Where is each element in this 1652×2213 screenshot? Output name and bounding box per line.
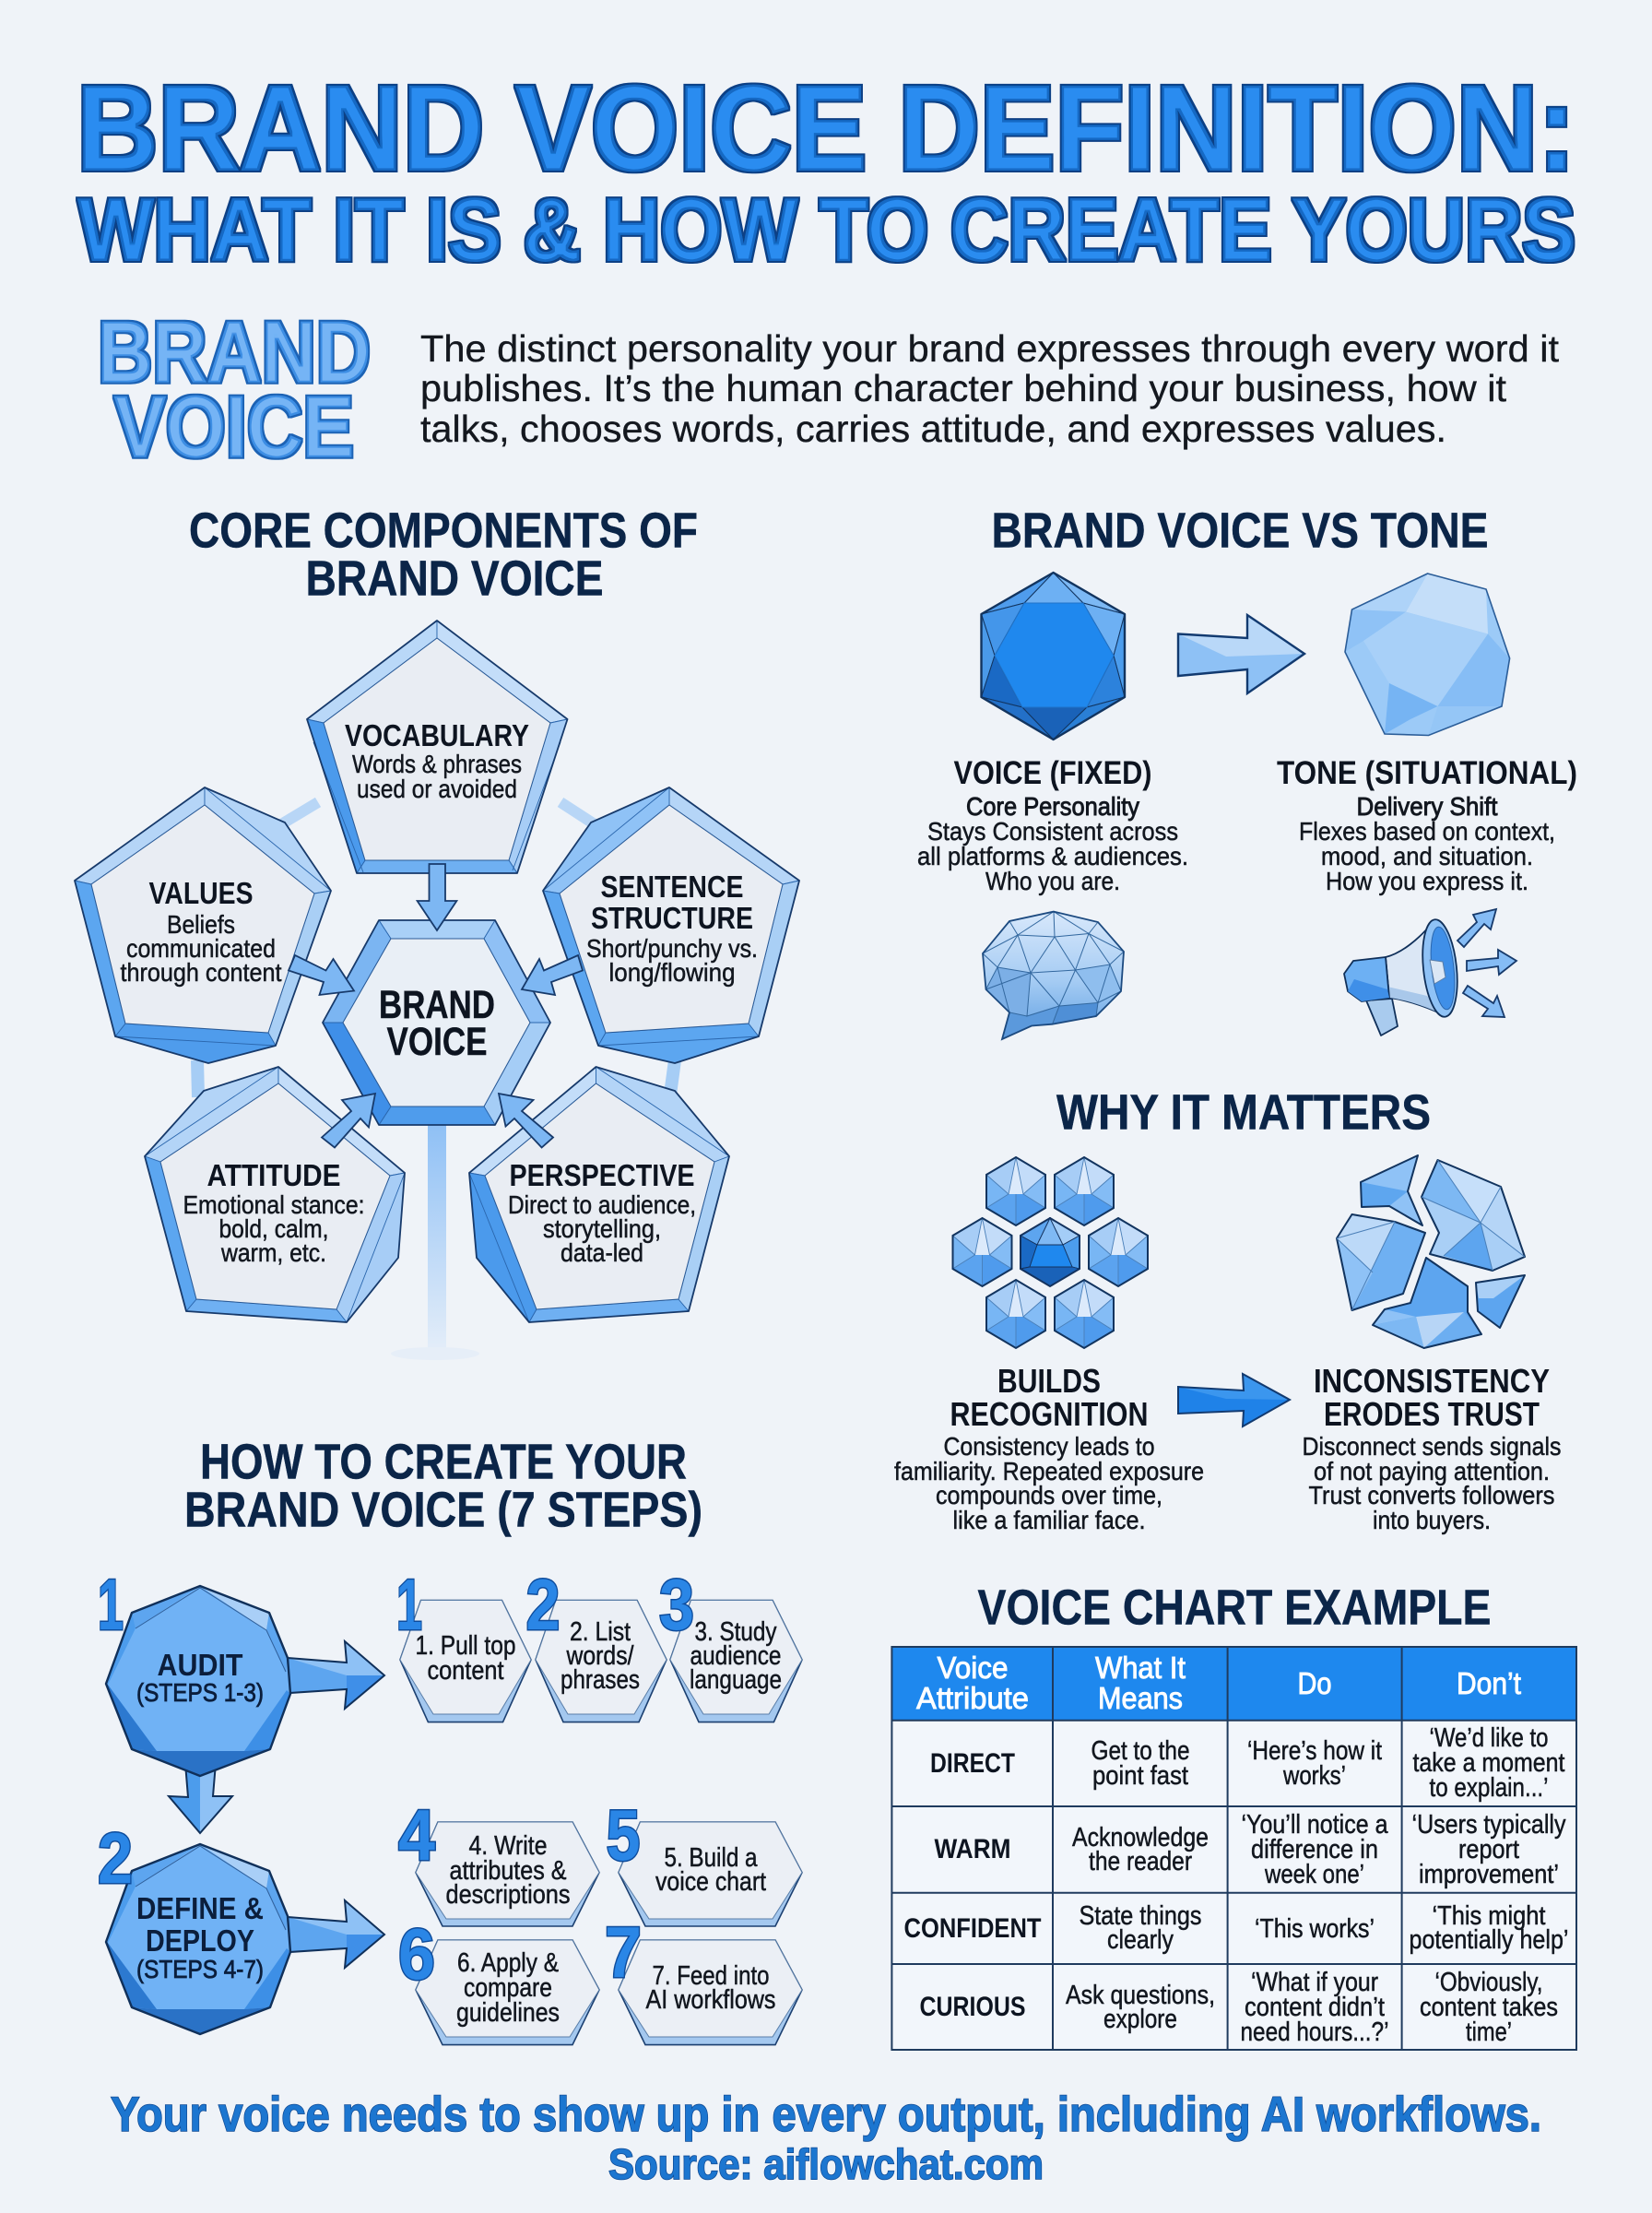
text: builds recognition: RECOGNITION <box>950 1395 1149 1433</box>
pentagon: vocabulary: used or avoided <box>357 775 517 803</box>
panel: steps flow <box>98 1564 802 2045</box>
row: warm: WARM <box>935 1834 1010 1864</box>
heading: core components: BRAND VOICE <box>306 551 603 607</box>
pentagon: vocabulary <box>307 621 568 873</box>
text: builds recognition: familiarity. Repeated exposure <box>894 1457 1204 1485</box>
row: warm: report <box>1458 1835 1519 1864</box>
pentagon: sentence structure: STRUCTURE <box>591 901 753 935</box>
pentagon: sentence structure <box>543 787 799 1063</box>
row: direct: to explain...’ <box>1429 1773 1549 1803</box>
text: inconsistency erodes trust: ERODES TRUST <box>1324 1395 1540 1433</box>
text: voice fixed: all platforms & audiences. <box>917 842 1188 870</box>
text: builds recognition: compounds over time, <box>936 1481 1162 1509</box>
row: warm: ‘You’ll notice a <box>1241 1810 1388 1840</box>
big numerals: 1 <box>396 1564 422 1645</box>
row: curious: explore <box>1103 2005 1177 2034</box>
row: warm: improvement’ <box>1419 1860 1559 1889</box>
heading: voice vs tone: BRAND VOICE VS TONE <box>992 503 1488 559</box>
step 2: words/ <box>566 1641 634 1671</box>
pentagon: vocabulary: Words & phrases <box>352 750 522 778</box>
heading: how to create: HOW TO CREATE YOUR <box>200 1435 687 1490</box>
definition text: publishes. It’s the human character behind your business, how it <box>420 367 1507 409</box>
pentagon: attitude: Emotional stance: <box>183 1190 365 1219</box>
step 3: audience <box>690 1641 782 1671</box>
pentagon: vocabulary: VOCABULARY <box>345 718 529 752</box>
heading: voice chart: VOICE CHART EXAMPLE <box>977 1580 1492 1636</box>
arrow: recognition to trust <box>1178 1374 1290 1426</box>
row: warm: ‘Users typically <box>1412 1810 1566 1840</box>
hexagon: brand voice: BRAND <box>379 983 495 1027</box>
big numerals: 7 <box>605 1911 642 1993</box>
arrow: voice to tone <box>1178 615 1304 693</box>
hexagon: brand voice: VOICE <box>387 1020 487 1064</box>
text: tone situational: Flexes based on context, <box>1299 817 1555 846</box>
definition text <box>420 327 1560 450</box>
row: direct: ‘Here’s how it <box>1247 1736 1382 1766</box>
step 5: voice chart <box>655 1867 766 1897</box>
title <box>77 60 1575 279</box>
pentagon: values: communicated <box>126 934 276 963</box>
icon: voice gem <box>981 573 1125 740</box>
text: tone situational: TONE (SITUATIONAL) <box>1277 755 1577 791</box>
step 7: AI workflows <box>645 1985 776 2015</box>
text: builds recognition: BUILDS <box>997 1362 1101 1400</box>
pentagon: perspective: data-led <box>560 1238 643 1267</box>
arrow: audit to steps <box>288 1641 384 1709</box>
row: confident: CONFIDENT <box>903 1913 1042 1944</box>
text: voice fixed: Who you are. <box>985 867 1120 895</box>
heading: why it matters: WHY IT MATTERS <box>1056 1084 1431 1140</box>
step 6: 6. Apply & <box>457 1948 559 1978</box>
step 4: descriptions <box>446 1880 570 1910</box>
gem: audit: AUDIT <box>157 1648 243 1682</box>
footer <box>111 2088 1541 2188</box>
arrow: define to steps <box>288 1900 384 1968</box>
row: direct: works’ <box>1282 1761 1346 1791</box>
pentagon: perspective: Direct to audience, <box>508 1190 696 1219</box>
text: voice fixed: VOICE (FIXED) <box>953 755 1152 791</box>
text: inconsistency erodes trust: Disconnect sends signals <box>1302 1432 1562 1461</box>
step 3: 3. Study <box>695 1617 777 1647</box>
arrow: audit to define <box>169 1752 232 1833</box>
row: warm: the reader <box>1089 1847 1192 1876</box>
row: direct: ‘We’d like to <box>1429 1723 1549 1753</box>
row: confident: ‘This might <box>1433 1901 1545 1931</box>
text: builds recognition: like a familiar face. <box>953 1506 1145 1534</box>
connectors <box>197 802 675 1097</box>
arrow: values to centre <box>289 955 354 995</box>
row: curious: content didn’t <box>1245 1993 1385 2022</box>
pentagon: attitude: warm, etc. <box>220 1238 326 1267</box>
row: direct: DIRECT <box>930 1748 1015 1779</box>
heading: core components: CORE COMPONENTS OF <box>189 503 698 559</box>
row: warm: difference in <box>1251 1835 1378 1864</box>
step 1 <box>400 1601 531 1722</box>
row: direct: Get to the <box>1092 1736 1189 1766</box>
arrow: vocabulary to centre <box>418 864 456 930</box>
text: inconsistency erodes trust <box>1302 1362 1562 1534</box>
gem: define and deploy: DEPLOY <box>146 1923 254 1958</box>
step 5 <box>619 1822 802 1926</box>
row: confident: potentially help’ <box>1409 1925 1569 1955</box>
row: confident <box>903 1901 1569 1955</box>
gem: define and deploy <box>106 1844 290 2034</box>
arrow: sentence structure to centre <box>522 955 583 995</box>
heading: how to create: BRAND VOICE (7 STEPS) <box>184 1483 702 1538</box>
row: curious: need hours...?’ <box>1241 2018 1388 2047</box>
pentagon: values: Beliefs <box>167 910 235 939</box>
brand voice wordmark: BRAND <box>98 303 371 400</box>
step 6: compare <box>464 1973 552 2003</box>
step 7: 7. Feed into <box>653 1961 769 1991</box>
pentagon: sentence structure: Short/punchy vs. <box>586 934 758 963</box>
pentagon: attitude: ATTITUDE <box>206 1158 341 1192</box>
step 4: attributes & <box>450 1856 566 1886</box>
step 1: content <box>428 1656 503 1686</box>
icon: megaphone <box>1344 917 1461 1035</box>
step 6 <box>416 1940 599 2045</box>
footer: Source: aiflowchat.com <box>608 2140 1044 2188</box>
text: voice fixed: Core Personality <box>966 792 1139 821</box>
text: tone situational: mood, and situation. <box>1321 842 1533 870</box>
step 7 <box>619 1940 802 2045</box>
row: curious: Ask questions, <box>1066 1981 1215 2010</box>
row: curious: time’ <box>1466 2018 1512 2047</box>
icon: hexagon cluster <box>953 1157 1148 1348</box>
table: voice chart <box>891 1647 1576 2050</box>
row: curious: ‘What if your <box>1251 1968 1378 1997</box>
text: inconsistency erodes trust: of not paying attention. <box>1314 1457 1550 1485</box>
row: direct: point fast <box>1092 1761 1188 1791</box>
big numerals: 4 <box>398 1794 435 1876</box>
brand voice wordmark <box>98 303 371 475</box>
row: confident: ‘This works’ <box>1255 1914 1375 1944</box>
step 5: 5. Build a <box>664 1843 758 1873</box>
text: voice fixed: Stays Consistent across <box>927 817 1178 846</box>
header row: Do <box>1298 1666 1331 1700</box>
text: tone situational: Delivery Shift <box>1357 792 1498 821</box>
header row: Don’t <box>1457 1666 1521 1700</box>
step 4: 4. Write <box>468 1831 548 1861</box>
row: curious: CURIOUS <box>920 1992 1025 2022</box>
header row: Voice <box>937 1651 1009 1685</box>
arrow: attitude to centre <box>322 1094 375 1147</box>
row: curious: ‘Obviously, <box>1434 1968 1543 1997</box>
row: confident: State things <box>1079 1901 1202 1931</box>
text: tone situational <box>1277 755 1577 895</box>
header row: Means <box>1098 1681 1183 1715</box>
row: direct <box>930 1723 1565 1803</box>
step 1: 1. Pull top <box>415 1631 516 1661</box>
step 3 <box>670 1601 802 1722</box>
pentagon: sentence structure: SENTENCE <box>601 870 743 904</box>
brand voice wordmark: VOICE <box>114 378 354 475</box>
pentagon: attitude: bold, calm, <box>219 1214 328 1243</box>
big numerals: 2 <box>525 1564 560 1645</box>
row: curious: content takes <box>1420 1993 1558 2022</box>
step 2: phrases <box>560 1665 640 1695</box>
pentagon: values: through content <box>120 958 282 987</box>
big numerals: 6 <box>398 1913 435 1994</box>
arrows: megaphone sound <box>1457 909 1516 1017</box>
big numerals: 2 <box>98 1817 133 1899</box>
row: warm <box>935 1810 1566 1889</box>
stem <box>391 1125 479 1360</box>
pentagon: perspective: storytelling, <box>543 1214 661 1243</box>
header row <box>916 1651 1521 1715</box>
pentagon: perspective: PERSPECTIVE <box>509 1158 695 1192</box>
gem: define and deploy: (STEPS 4-7) <box>136 1955 264 1983</box>
gem: define and deploy: DEFINE & <box>136 1891 264 1925</box>
row: warm: week one’ <box>1264 1860 1364 1889</box>
step 6: guidelines <box>456 1998 560 2028</box>
row: confident: clearly <box>1107 1925 1174 1955</box>
step 3: language <box>690 1665 782 1695</box>
text: tone situational: How you express it. <box>1326 867 1528 895</box>
big numerals <box>98 1564 694 1994</box>
pentagon: values <box>75 787 331 1063</box>
heading: core components <box>189 503 698 607</box>
row: warm: Acknowledge <box>1072 1823 1209 1852</box>
step 4 <box>416 1822 599 1926</box>
arrow: perspective to centre <box>499 1094 553 1147</box>
text: builds recognition: Consistency leads to <box>944 1432 1154 1461</box>
panel: core components diagram <box>75 621 799 1360</box>
text: inconsistency erodes trust: into buyers. <box>1373 1506 1491 1534</box>
pentagon: attitude <box>145 1067 405 1322</box>
big numerals: 3 <box>659 1564 694 1645</box>
row: curious <box>920 1968 1558 2047</box>
icon: shattered gem <box>1337 1155 1525 1348</box>
pentagon: sentence structure: long/flowing <box>608 958 736 987</box>
gem: audit <box>106 1586 290 1776</box>
big numerals: 1 <box>98 1564 124 1645</box>
text: inconsistency erodes trust: INCONSISTENCY <box>1314 1362 1550 1400</box>
text: inconsistency erodes trust: Trust converts followers <box>1309 1481 1554 1509</box>
heading: how to create <box>184 1435 702 1538</box>
gem: audit: (STEPS 1-3) <box>136 1678 264 1707</box>
title: BRAND VOICE DEFINITION: <box>77 60 1575 195</box>
hexagon: brand voice <box>323 920 550 1125</box>
pentagon: perspective <box>469 1067 729 1322</box>
big numerals: 5 <box>607 1794 640 1876</box>
text: voice fixed <box>917 755 1188 895</box>
icon: tone gem <box>1345 574 1510 736</box>
definition text: talks, chooses words, carries attitude, and expresses values. <box>420 408 1446 450</box>
header row: Attribute <box>916 1681 1029 1715</box>
pentagon: values: VALUES <box>149 876 253 910</box>
step 2 <box>536 1601 667 1722</box>
row: direct: take a moment <box>1412 1748 1565 1778</box>
step 2: 2. List <box>570 1617 631 1647</box>
header row: What It <box>1095 1651 1186 1685</box>
icon: speech bubble <box>983 912 1124 1039</box>
definition text: The distinct personality your brand expresses through every word it <box>420 327 1560 370</box>
text: builds recognition <box>894 1362 1204 1534</box>
